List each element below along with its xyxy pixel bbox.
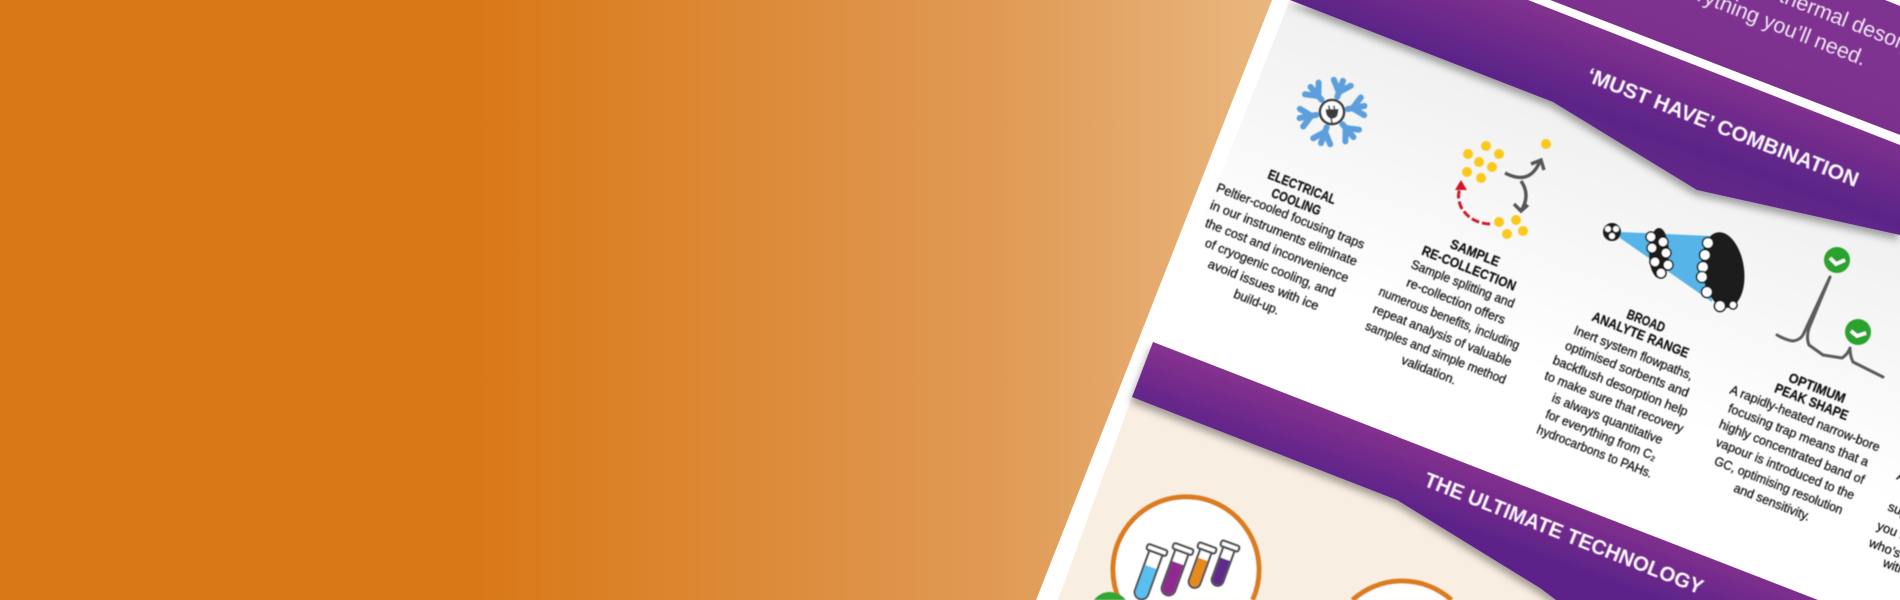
text: broad analyte range: optimised sorbents and [1563,338,1691,400]
tube: orange [1184,542,1217,591]
heading: the ultimate technology: THE ULTIMATE TECHNOLOGY [1421,469,1706,599]
text: broad analyte range: BROAD [1625,307,1668,335]
text: electrical cooling: Peltier-cooled focusing traps [1214,180,1367,252]
text: optimum peak shape: A rapidly-heated narrow-bore [1728,382,1882,454]
second orange circle [1352,581,1452,600]
text: optimum peak shape: GC, optimising resolution [1712,453,1845,517]
intro text [1697,0,1900,66]
text: broad analyte range: hydrocarbons to PAHs. [1535,422,1655,481]
icon: broad analyte range [1603,223,1749,312]
white stripe [1550,0,1900,135]
text: sample re-collection: SAMPLE [1448,236,1502,270]
text: broad analyte range: for everything from C₂ [1543,406,1659,464]
text: sample re-collection: re-collection offers [1405,275,1508,327]
text: broad analyte range [1536,308,1692,478]
tube: blue [1129,544,1168,600]
icon: snowflake with plug [1296,76,1368,148]
band: must have combination [1290,0,1900,235]
band: ultimate technology [1132,342,1818,600]
sheet white paper [1036,0,1900,600]
text: sample re-collection: RE-COLLECTION [1420,243,1518,294]
header band above white stripe [1550,0,1900,135]
text: electrical cooling: of cryogenic cooling, and [1203,235,1338,300]
text: sample re-collection: validation. [1399,352,1459,387]
text: optimum peak shape: and sensitivity. [1732,480,1813,524]
icon: optimum peak shape [1777,247,1883,377]
text: broad analyte range: Inert system flowpaths, [1572,322,1695,383]
text: electrical cooling: build-up. [1232,286,1282,318]
tilted infographic sheet [1036,0,1900,600]
text: sample re-collection: repeat analysis of valuable [1371,301,1514,369]
panel: ultimate technology background [1058,397,1556,600]
text: sample re-collection: Sample splitting and [1409,257,1517,311]
text: optimum peak shape: vapour is introduced to the [1714,434,1857,502]
text: optimum peak shape [1714,372,1880,522]
icon: sample re-collection [1455,139,1551,239]
text: electrical cooling [1204,168,1365,316]
text: electrical cooling: COOLING [1269,185,1323,218]
text: clipped fifth column [1868,474,1900,574]
text: optimum peak shape: highly concentrated band of [1717,416,1867,487]
text: broad analyte range: backflush desorption help [1551,352,1690,419]
text: sample re-collection [1364,239,1520,385]
icon: test tubes in circle [1094,497,1452,600]
text: optimum peak shape: OPTIMUM [1786,370,1848,406]
panel: must have combination background [1245,0,1900,358]
text: broad analyte range: is always quantitative [1550,390,1665,447]
heading: must have combination: ‘MUST HAVE’ COMBINATION [1584,64,1862,192]
text: electrical cooling: in our instruments eliminate [1208,197,1360,269]
text: electrical cooling: the cost and inconvenience [1203,215,1351,285]
text: broad analyte range: to make sure that recovery [1542,368,1686,436]
text: electrical cooling: ELECTRICAL [1266,167,1338,207]
text: optimum peak shape: focusing trap means that a [1726,400,1872,470]
tube: purple [1156,543,1194,599]
text: sample re-collection: numerous benefits, including [1377,284,1522,353]
tube: dark purple [1207,540,1240,589]
text: optimum peak shape: PEAK SHAPE [1772,381,1851,423]
green badge [1094,592,1126,600]
corner stripe [1885,0,1900,6]
text: sample re-collection: samples and simple method [1363,318,1508,387]
text: electrical cooling: avoid issues with ice [1206,256,1321,313]
text: broad analyte range: ANALYTE RANGE [1590,309,1691,361]
